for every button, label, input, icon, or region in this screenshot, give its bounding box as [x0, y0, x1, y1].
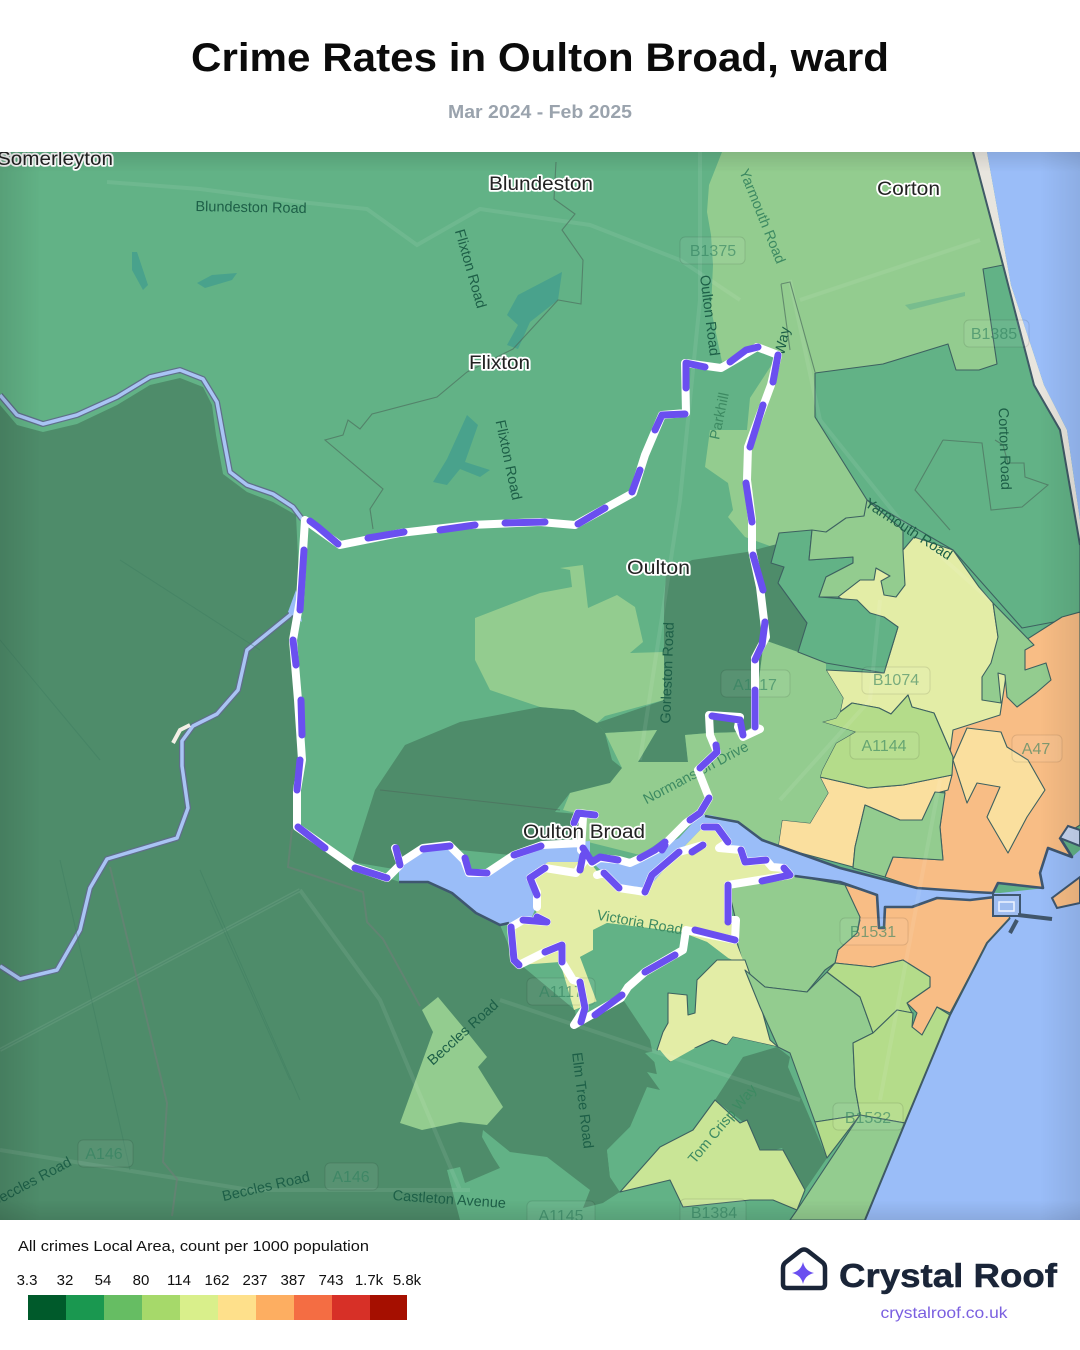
- region: Tom Crisp Way dark: [715, 1047, 827, 1190]
- Oulton Broad water: [399, 841, 590, 925]
- legend values: 54: [95, 1272, 111, 1289]
- legend values: 5.8k: [393, 1272, 422, 1289]
- road name labels: Yarmouth Road: [862, 496, 955, 564]
- subtitle: date range: Mar 2024 - Feb 2025: [448, 102, 632, 122]
- road name labels: Beccles Road: [425, 997, 502, 1069]
- road name labels: Blundeston Road: [195, 199, 307, 217]
- legend: [17, 1238, 422, 1320]
- legend values: 3.3: [17, 1272, 37, 1289]
- legend values: 1.7k: [355, 1272, 384, 1289]
- road shield labels: A47: [1022, 741, 1050, 758]
- region: lighter green near the coast: [827, 960, 930, 1033]
- road name labels: Parkhill: [707, 391, 733, 441]
- road name labels: Flixton Road: [451, 228, 489, 310]
- channel banks: [399, 816, 1072, 928]
- legend values: 114: [167, 1272, 191, 1289]
- place labels: [0, 149, 940, 843]
- region: A1144 lighter green: [820, 695, 953, 788]
- road shield labels: A1145: [538, 1208, 584, 1225]
- ward boundary: white casing: [293, 347, 790, 1025]
- road name labels: [0, 167, 1013, 1212]
- pale road bands: [0, 152, 990, 1190]
- legend values: 32: [57, 1272, 73, 1289]
- region: south channel orange: [835, 885, 1010, 1035]
- legend values: [17, 1272, 422, 1289]
- region: dark western and southern marshes: [0, 378, 660, 1220]
- place labels: Blundeston: [489, 174, 593, 195]
- ward boundary: purple dashes: [293, 347, 790, 1022]
- sea south and harbour: [865, 848, 1080, 1220]
- region: medium-light coast band: [745, 970, 873, 1122]
- region: yellow Harris Avenue area: [657, 960, 778, 1062]
- field boundaries: [0, 560, 300, 1170]
- road name labels: Way: [772, 325, 794, 357]
- lakes and drains: [132, 252, 965, 485]
- road shield labels: B1074: [873, 672, 919, 689]
- region: Beccles Road light green: [400, 997, 503, 1130]
- harbour building: [1060, 826, 1080, 846]
- road shield labels: A1117: [539, 984, 583, 1001]
- region: ward yellow: [511, 828, 790, 1010]
- road name labels: Elm Tree Road: [568, 1052, 596, 1149]
- place labels: Oulton: [627, 558, 690, 579]
- road name labels: Tom Crisp Way: [685, 1081, 761, 1167]
- road shield labels: A146: [85, 1146, 123, 1163]
- legend title: All crimes Local Area, count per 1000 population: [18, 1238, 369, 1255]
- legend values: 162: [204, 1272, 230, 1289]
- road name labels: Gorleston Road: [658, 622, 678, 724]
- region: medium green bottom: [447, 1130, 619, 1220]
- road name labels: Yarmouth Road: [735, 167, 788, 266]
- road shield labels: A1117: [733, 677, 777, 694]
- rivers: [0, 370, 302, 979]
- region: light green Normanston: [563, 640, 855, 855]
- region: medium green south centre: [607, 1037, 778, 1176]
- river buildings: [173, 725, 190, 743]
- region: pale orange south west: [778, 775, 952, 867]
- logo: [783, 1250, 1058, 1322]
- map edge shading: [0, 152, 1080, 1220]
- title: Crime Rates in Oulton Broad, ward: [191, 36, 889, 80]
- legend colour scale: [28, 1295, 407, 1320]
- region: coastal green bottom: [790, 1115, 905, 1220]
- region: light green east: [982, 603, 1051, 707]
- road shield labels: B1375: [690, 243, 736, 260]
- road name labels: Beccles Road: [221, 1169, 311, 1205]
- pier: [1010, 915, 1052, 933]
- region: pale orange: [953, 728, 1045, 853]
- road name labels: Victoria Road: [596, 908, 684, 938]
- road name labels: Oulton Road: [696, 274, 722, 357]
- region: light green pocket near Yarmouth Road: [809, 500, 905, 597]
- road name labels: Corton Road: [995, 407, 1013, 490]
- road shield labels: A146: [332, 1169, 370, 1186]
- road shield labels: [85, 243, 1050, 1225]
- place labels: Corton: [877, 179, 940, 200]
- region: small strip: [815, 1115, 860, 1158]
- place labels: Somerleyton: [0, 149, 113, 170]
- road shields: [78, 237, 1062, 1228]
- region: Corton medium green: [815, 265, 1080, 628]
- website url: crystalroof.co.uk: [880, 1305, 1009, 1322]
- region: dark Oulton: [597, 543, 807, 762]
- coast line: [865, 152, 1080, 1220]
- beach: [973, 152, 1080, 545]
- legend values: 237: [242, 1272, 268, 1289]
- road shield labels: B1384: [691, 1205, 737, 1222]
- road name labels: Flixton Road: [492, 419, 524, 502]
- region: orange north of the channel: [885, 612, 1080, 893]
- legend values: 80: [133, 1272, 149, 1289]
- region: green patch by the channel: [853, 792, 945, 877]
- region: coastal lighter green: [853, 1007, 950, 1123]
- road name labels: Normanston Drive: [641, 739, 751, 808]
- harbour port box: [993, 895, 1020, 916]
- region: medium green east of ward line: [771, 530, 898, 673]
- road shield labels: B1385: [971, 326, 1017, 343]
- parish and drainage lines: [325, 162, 1048, 810]
- region: dark band north of the broad: [352, 707, 622, 870]
- legend values: 743: [318, 1272, 344, 1289]
- icon: house with star: [783, 1250, 825, 1288]
- road shield labels: A1144: [861, 738, 907, 755]
- sea: [987, 152, 1080, 520]
- Lake Lothing channel: [590, 815, 1045, 928]
- brand name: Crystal Roof: [839, 1257, 1058, 1294]
- place labels: Oulton Broad: [523, 822, 645, 843]
- road shield labels: B1532: [845, 1110, 891, 1127]
- region: medium pocket south of Victoria Road: [580, 923, 728, 1002]
- harbour island: [1052, 877, 1080, 908]
- region: yellow central east: [826, 536, 1005, 748]
- road shield labels: B1531: [850, 924, 896, 941]
- choropleth map: [0, 149, 1080, 1228]
- region: light green west of Oulton: [475, 565, 664, 723]
- region: light green north east (Yarmouth Road): [705, 152, 1003, 550]
- region: green south of channel: [728, 875, 860, 992]
- road name labels: Castleton Avenue: [392, 1188, 506, 1212]
- grey tracks: [110, 829, 420, 1216]
- legend values: 387: [280, 1272, 306, 1289]
- region: Tom Crisp Way yellow-green: [620, 1100, 805, 1210]
- place labels: Flixton: [469, 353, 530, 374]
